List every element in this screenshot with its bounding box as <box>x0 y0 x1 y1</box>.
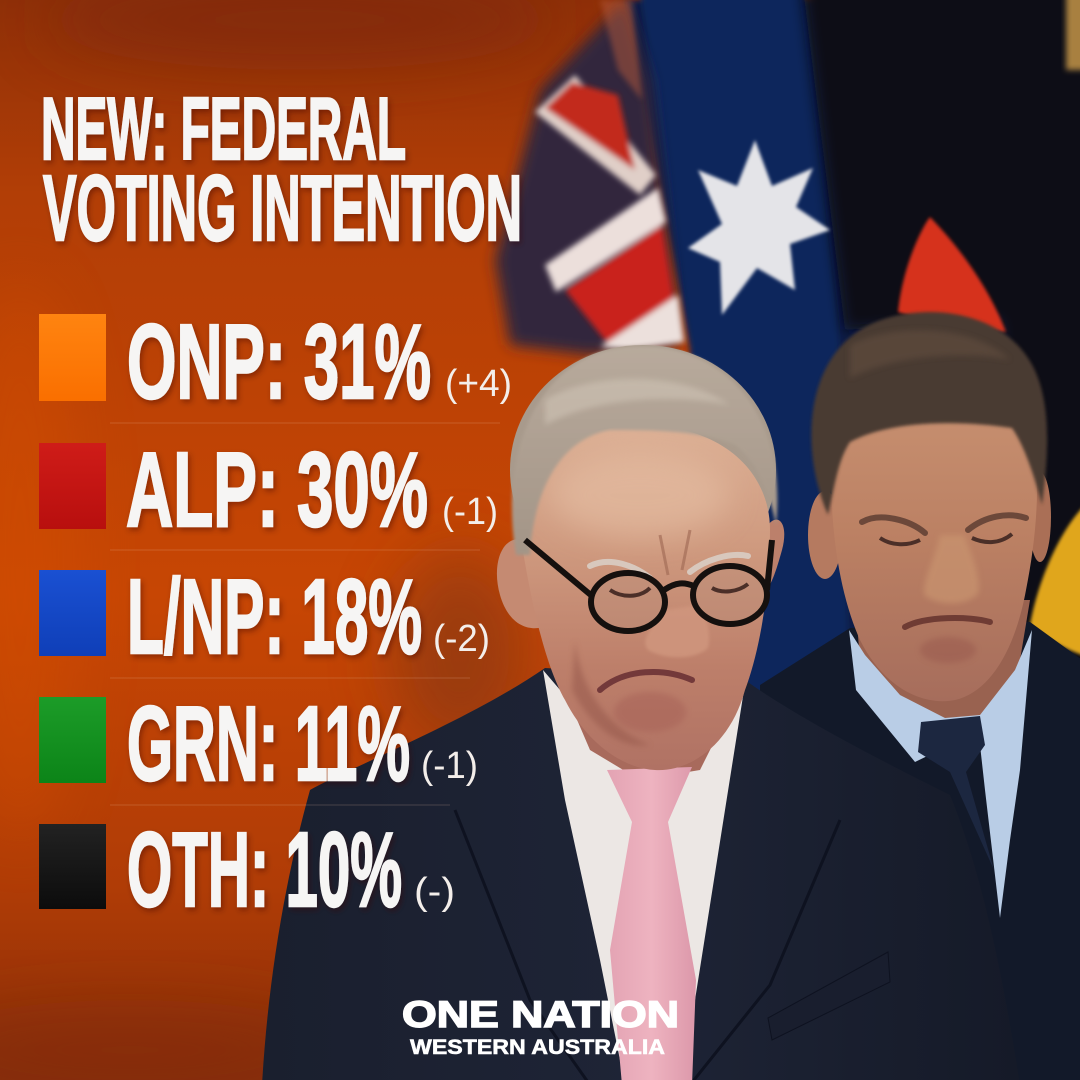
nose <box>645 605 709 657</box>
right ear <box>1029 472 1051 562</box>
logo: One Nation Western Australia: ONE NATION <box>402 994 679 1035</box>
change: none: (-) <box>414 871 455 913</box>
logo: One Nation Western Australia: WESTERN AUSTRALIA <box>410 1036 665 1059</box>
hair <box>512 346 777 555</box>
mouth <box>600 672 692 690</box>
row: OTH 10% (-) <box>39 811 455 929</box>
row dividers <box>110 423 500 805</box>
swatch: ALP red <box>39 443 106 529</box>
swatch: OTH black <box>39 824 106 909</box>
forehead highlight <box>550 453 730 537</box>
hair underlay <box>510 345 776 595</box>
title <box>41 79 522 260</box>
flag pole <box>1066 0 1080 70</box>
frown lines <box>660 530 690 575</box>
label: L/NP: L/NP: 18% <box>127 558 422 676</box>
shirt <box>543 670 744 1080</box>
mouth <box>905 618 990 627</box>
change: +4: (+4) <box>445 363 512 405</box>
title: VOTING INTENTION <box>43 156 522 260</box>
right ear <box>758 520 784 600</box>
change: -2: (-2) <box>433 618 490 660</box>
eyes and brows <box>862 515 1026 533</box>
suit <box>760 622 1080 1080</box>
suit <box>262 668 1020 1080</box>
label: ALP: ALP: 30% <box>126 431 428 549</box>
Aboriginal flag red <box>898 217 1006 332</box>
left ear <box>808 491 842 579</box>
tie <box>918 716 994 870</box>
change: -1: (-1) <box>442 491 498 533</box>
row: GRN 11% (-1) <box>39 685 478 803</box>
Union Jack canton <box>495 0 684 355</box>
head <box>831 380 1037 701</box>
head <box>518 425 770 770</box>
neck <box>855 600 1030 730</box>
logo: One Nation Western Australia <box>402 994 679 1059</box>
row: L/NP 18% (-2) <box>39 558 490 676</box>
panel: flags backdrop <box>495 0 1080 1080</box>
Australian flag navy field <box>625 0 1080 1080</box>
swatch: ONP orange <box>39 314 106 401</box>
shirt collar <box>849 630 1032 918</box>
row: ONP 31% (+4) <box>39 303 512 421</box>
brows <box>590 555 748 578</box>
illustration: rear man <box>760 312 1080 1080</box>
label: ONP: ONP: 31% <box>127 303 431 421</box>
glasses <box>525 540 772 631</box>
nose <box>924 535 979 603</box>
label: OTH: OTH: 10% <box>127 811 402 929</box>
Aboriginal flag black field <box>802 0 1080 700</box>
title: NEW: FEDERAL <box>41 79 406 178</box>
Commonwealth star <box>688 140 830 315</box>
left ear <box>497 539 548 628</box>
label: GRN: GRN: 11% <box>127 685 410 803</box>
eyes <box>610 584 748 596</box>
lapel lines <box>455 810 840 1080</box>
tie <box>607 767 696 1080</box>
change: -1: (-1) <box>421 745 478 787</box>
swatch: GRN green <box>39 697 106 783</box>
swatch: L/NP blue <box>39 570 106 656</box>
hair <box>811 312 1047 515</box>
jowl shading <box>572 640 650 746</box>
illustration: front man <box>262 345 1020 1080</box>
Aboriginal flag yellow <box>1030 505 1080 656</box>
neck shade <box>560 680 735 780</box>
row: ALP 30% (-1) <box>39 431 498 549</box>
